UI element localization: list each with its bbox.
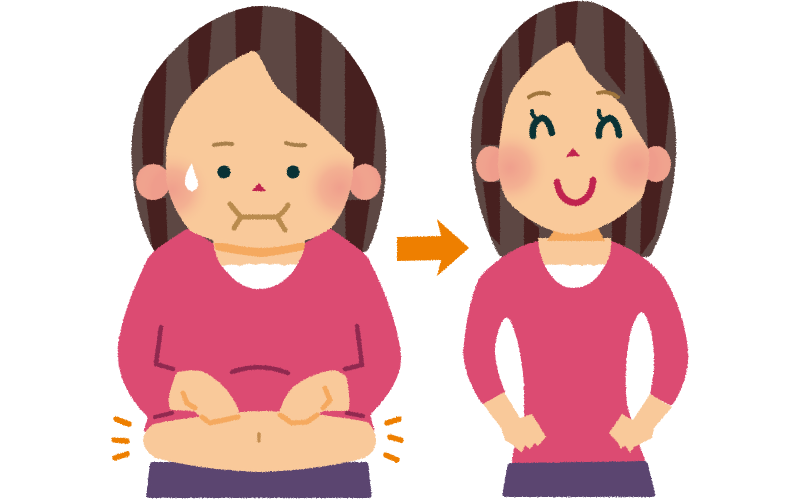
sweater <box>463 241 688 468</box>
figure: before, overweight woman pinching belly <box>114 3 401 498</box>
puffed mouth <box>230 204 288 230</box>
neck <box>213 238 305 266</box>
trousers <box>146 462 372 498</box>
navel <box>257 434 261 441</box>
sweater creases <box>156 326 362 373</box>
hair <box>471 0 676 257</box>
face <box>498 41 649 234</box>
hair <box>131 3 386 255</box>
collar <box>543 262 607 288</box>
neck <box>538 238 611 266</box>
ears <box>136 164 381 200</box>
smile <box>557 180 593 203</box>
eyebrows <box>214 143 305 145</box>
figure: after, slim smiling woman <box>463 0 688 497</box>
eyebrows <box>529 92 618 97</box>
arrow <box>397 219 469 276</box>
smiling eyes <box>532 111 619 136</box>
nose <box>252 183 266 191</box>
collar <box>219 262 299 289</box>
cheeks <box>476 128 671 204</box>
ears <box>476 146 671 182</box>
hands <box>155 370 363 423</box>
nose <box>566 148 580 157</box>
trousers <box>502 461 656 497</box>
motion ticks <box>114 419 401 460</box>
hands <box>483 392 672 453</box>
cheeks <box>136 151 374 224</box>
sweat drop <box>185 163 198 191</box>
neck shadow <box>547 226 605 241</box>
sweater <box>118 228 401 432</box>
eyes <box>218 166 300 178</box>
neck shadow <box>214 243 305 257</box>
belly <box>143 411 376 472</box>
face <box>166 50 354 248</box>
